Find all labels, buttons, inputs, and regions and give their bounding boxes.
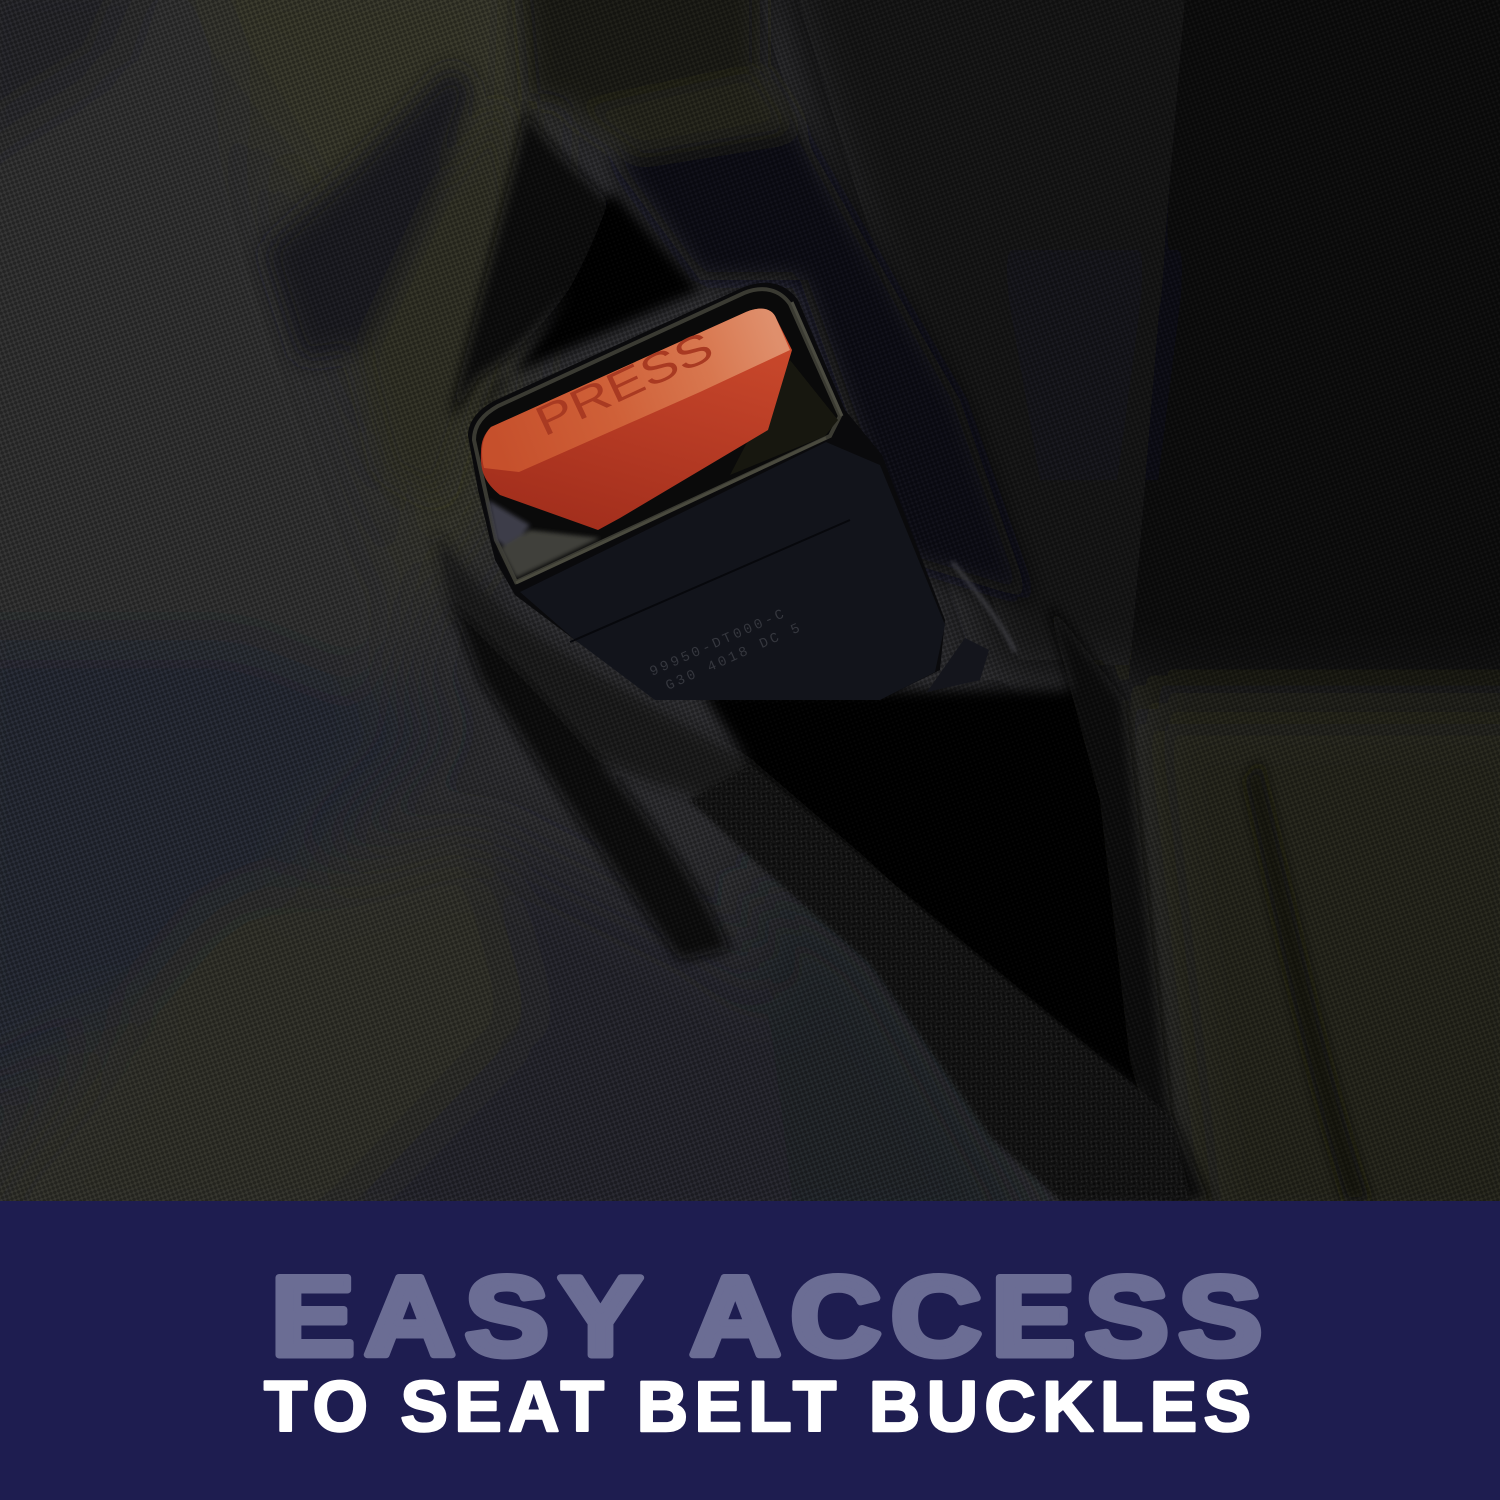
heading: EASY ACCESS: EASY ACCESS: [271, 1254, 1262, 1379]
label: PRESS embossed text: PRESS: [528, 322, 720, 445]
subheading: TO SEAT BELT BUCKLES: TO SEAT BELT BUCKLES: [264, 1368, 1251, 1447]
fabric: deep shadow fold: [450, 600, 730, 960]
belt anchor strap: [927, 562, 1015, 692]
seat belt buckle: [468, 283, 945, 700]
icon: buckle frame: [474, 289, 840, 582]
icon: inner metal shine: [488, 500, 600, 578]
velcro strip along the opening: [690, 765, 1190, 1201]
fabric: olive fold: [360, 100, 515, 500]
embossed codes on buckle: 99950-DT000-C: [648, 606, 789, 681]
icon: lower tongue housing: [520, 442, 945, 700]
embossed codes on buckle: G30 4018 DC 5: [664, 620, 805, 695]
icon: red release button: [481, 309, 792, 530]
fabric: right-hand seam: [1047, 600, 1210, 1201]
fabric: upper velcro flap: [450, 110, 612, 420]
fabric: herringbone dark fold: [265, 65, 475, 360]
fabric: fold edge beside buckle: [435, 530, 1000, 1010]
bottom banner: [0, 1201, 1500, 1500]
fabric: opening shadow: [470, 190, 700, 420]
fabric: black wedge below the buckle: [700, 690, 1171, 1118]
icon: buckle housing: [468, 283, 945, 700]
icon: right inner metal: [730, 360, 838, 475]
